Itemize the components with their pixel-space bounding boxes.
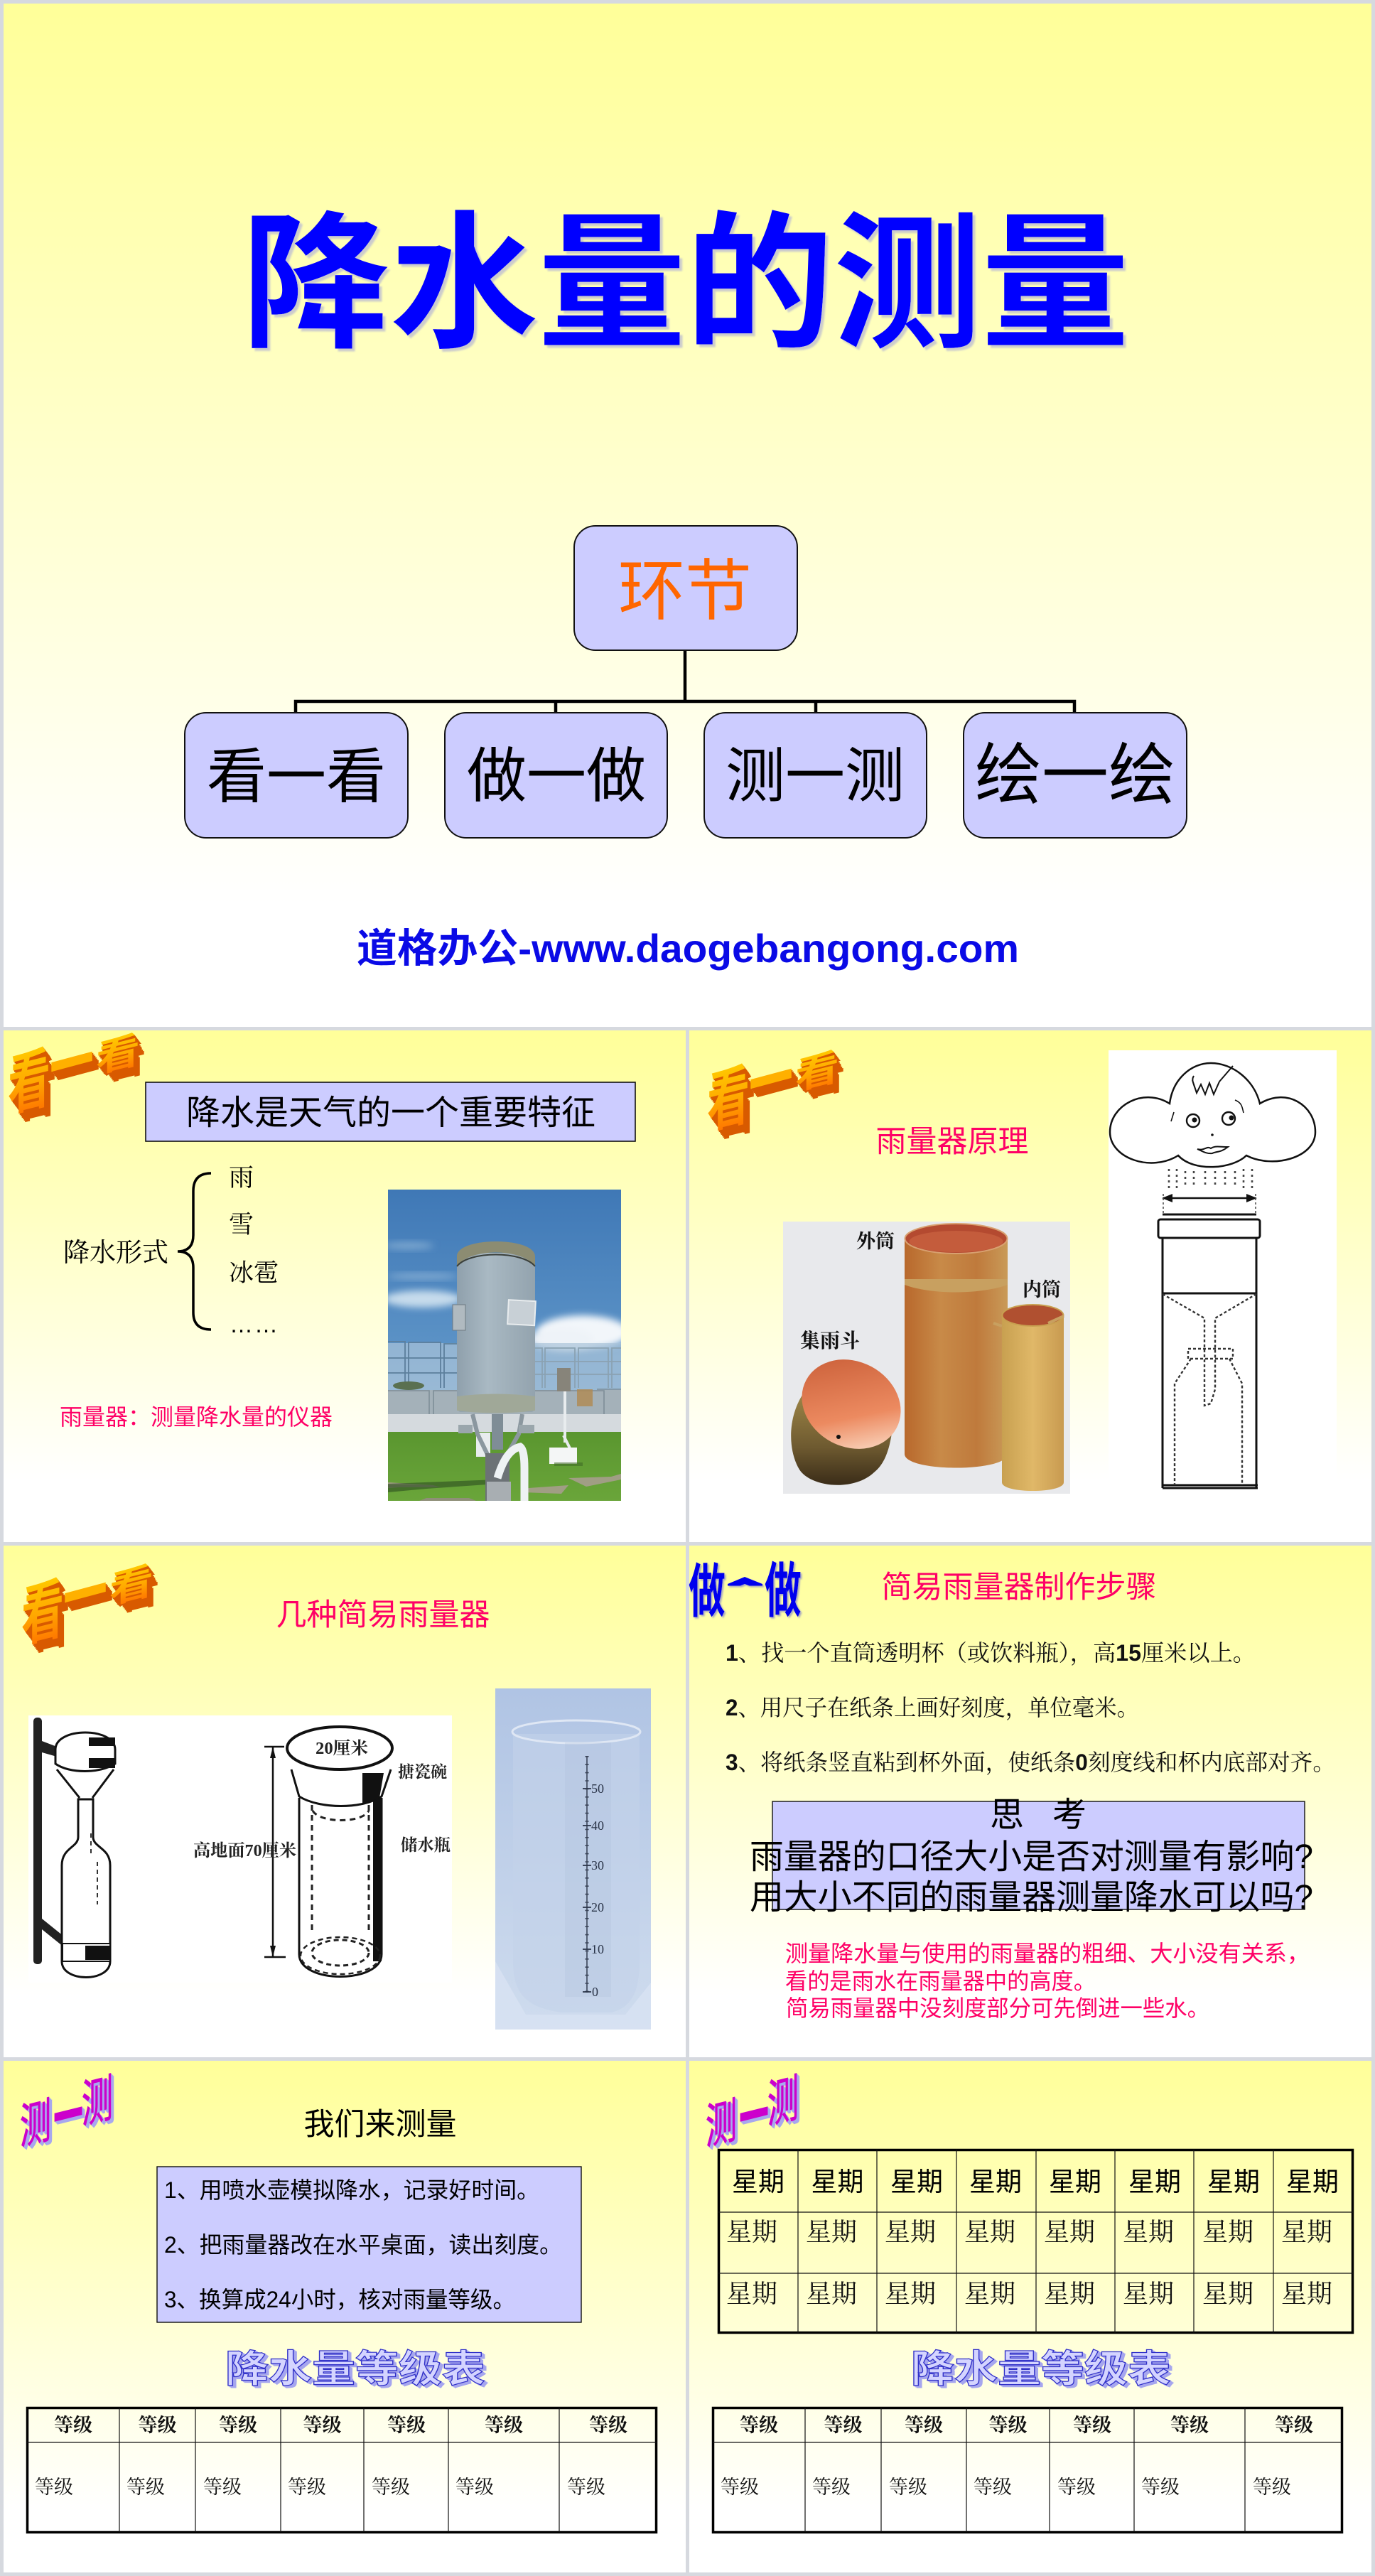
heading: 简易雨量器制作步骤 (881, 1570, 1157, 1605)
table: week record: 星期 (1123, 2218, 1174, 2246)
wordart: do: 做 (765, 1558, 802, 1624)
photo: copper gauge parts: 内筒 (1023, 1279, 1061, 1300)
wordart: measure (706, 2069, 799, 2156)
wordart: measure: 一 (739, 2077, 769, 2156)
wordart: measure (20, 2069, 113, 2156)
wordart: look: 看 (8, 1040, 50, 1124)
table: precipitation grades (713, 2408, 1342, 2533)
table: week record: 星期 (1044, 2280, 1095, 2308)
wordart: measure: 测 (82, 2069, 113, 2134)
steps box: 1、用喷水壶模拟降水，记录好时间。 (164, 2177, 539, 2203)
table: week record: 星期 (1044, 2218, 1095, 2246)
table: week record: 星期 (885, 2218, 936, 2246)
photo: graduated glass: 40 (591, 1818, 604, 1833)
table: week record: 星期 (964, 2218, 1015, 2246)
table: week record: 星期 (806, 2218, 857, 2246)
table: week record: 星期 (1049, 2167, 1101, 2197)
heading: 雨量器原理 (875, 1125, 1029, 1159)
wordart: grade table title: 降水量等级表 (225, 2348, 485, 2391)
wordart: look: 一 (63, 1550, 107, 1642)
steps box: 2、把雨量器改在水平桌面，读出刻度。 (164, 2232, 562, 2258)
table: precipitation grades: 等级 (54, 2415, 92, 2436)
list of forms (229, 1164, 279, 1337)
table: precipitation grades: 等级 (387, 2415, 426, 2436)
heading: 几种简易雨量器 (276, 1598, 490, 1632)
brace (178, 1173, 211, 1330)
think box: 思 考 (990, 1796, 1086, 1834)
table: week record: 星期 (806, 2280, 857, 2308)
table: precipitation grades: 等级 (455, 2477, 494, 2498)
org chart: node measure: 测一测 (726, 743, 905, 809)
table: week record: 星期 (1128, 2167, 1181, 2197)
dimension labels: 储水瓶 (401, 1836, 451, 1854)
wordart: do (689, 1561, 803, 1620)
table: week record: 星期 (726, 2218, 777, 2246)
table: precipitation grades: 等级 (824, 2415, 863, 2436)
wordart: look: 看 (96, 1029, 140, 1081)
step list (726, 1640, 1335, 1775)
step list: 2、用尺子在纸条上画好刻度，单位毫米。 (726, 1695, 1139, 1720)
answer text (785, 1941, 1310, 2021)
org chart: node draw: 绘一绘 (975, 738, 1175, 812)
table: precipitation grades: 等级 (889, 2477, 927, 2498)
photo: copper gauge parts: 外筒 (856, 1231, 895, 1252)
list of forms: 雨 (229, 1164, 254, 1192)
table: precipitation grades: 等级 (126, 2477, 165, 2498)
wordart: look: 看 (707, 1057, 750, 1141)
table: week record: 星期 (732, 2167, 784, 2197)
photo: graduated glass: 10 (591, 1942, 604, 1956)
panel: gauge principle slide (707, 1036, 1337, 1499)
diagram: bottle and bowl gauges (28, 1715, 452, 1983)
wordart: look (21, 1550, 153, 1655)
dimension labels: 搪瓷碗 (398, 1763, 447, 1781)
table: week record: 星期 (1207, 2167, 1260, 2197)
think box (750, 1796, 1313, 1917)
answer text: 测量降水量与使用的雨量器的粗细、大小没有关系， (785, 1941, 1310, 1966)
table: week record: 星期 (1202, 2280, 1253, 2308)
wordart: look: 看 (109, 1560, 153, 1612)
step list: 3、将纸条竖直粘到杯外面，使纸条0刻度线和杯内底部对齐。 (726, 1750, 1335, 1775)
table: precipitation grades: 等级 (812, 2477, 851, 2498)
photo: rain gauge outdoors (384, 1190, 629, 1503)
wordart: measure: 测 (767, 2069, 799, 2134)
table: precipitation grades: 等级 (203, 2477, 242, 2498)
wordart: look (707, 1036, 839, 1141)
title: 降水量的测量 (242, 203, 1129, 367)
list of forms: 冰雹 (229, 1259, 279, 1287)
table: precipitation grades: 等级 (567, 2477, 605, 2498)
heading box: 降水是天气的一个重要特征 (186, 1094, 595, 1132)
table: week record (718, 2150, 1353, 2333)
think box: 雨量器的口径大小是否对测量有影响? (750, 1838, 1313, 1876)
diagram: cloud over rain gauge (1109, 1050, 1337, 1499)
table: precipitation grades: 等级 (138, 2415, 176, 2436)
step list: 1、找一个直筒透明杯（或饮料瓶），高15厘米以上。 (726, 1640, 1256, 1666)
table: precipitation grades: 等级 (989, 2415, 1028, 2436)
dimension labels (193, 1739, 451, 1860)
panel: cover slide (185, 203, 1187, 971)
table: week record: 星期 (1286, 2167, 1339, 2197)
photo: graduated glass: 0 (592, 1985, 598, 1999)
table: precipitation grades: 等级 (740, 2415, 778, 2436)
table: week record: 星期 (885, 2280, 936, 2308)
list of forms: 雪 (229, 1211, 254, 1239)
table: precipitation grades: 等级 (1253, 2477, 1291, 2498)
heading: 我们来测量 (304, 2108, 456, 2142)
dimension labels: 20厘米 (316, 1739, 368, 1758)
wordart: measure: 测 (20, 2094, 51, 2155)
table: precipitation grades: 等级 (303, 2415, 341, 2436)
steps box: 3、换算成24小时，核对雨量等级。 (164, 2287, 515, 2312)
panel: measure slide, steps and grade table (20, 2069, 657, 2533)
think box: 用大小不同的雨量器测量降水可以吗? (750, 1879, 1313, 1917)
panel: simple rain gauges slide (21, 1550, 651, 2030)
definition text: 雨量器：测量降水量的仪器 (60, 1404, 333, 1430)
photo: graduated glass: 20 (591, 1900, 604, 1914)
table: week record: 星期 (726, 2280, 777, 2308)
wordart: measure: 一 (53, 2077, 83, 2156)
org chart: node look: 看一看 (207, 743, 386, 810)
wordart: look: 看 (21, 1571, 64, 1655)
org chart: node look (185, 713, 408, 838)
table: precipitation grades (27, 2408, 657, 2533)
table: week record: 星期 (811, 2167, 864, 2197)
photo: graduated glass (495, 1688, 651, 2030)
wordart: do: 做 (689, 1559, 726, 1624)
table: week record: 星期 (1202, 2218, 1253, 2246)
table: week record: 星期 (890, 2167, 943, 2197)
table: precipitation grades: 等级 (1073, 2415, 1111, 2436)
table: precipitation grades: 等级 (589, 2415, 627, 2436)
table: precipitation grades: 等级 (485, 2415, 523, 2436)
table: precipitation grades: 等级 (721, 2477, 759, 2498)
table: precipitation grades: 等级 (288, 2477, 326, 2498)
table: precipitation grades: 等级 (35, 2477, 73, 2498)
wordart: look: 一 (749, 1036, 793, 1128)
table: precipitation grades: 等级 (1057, 2477, 1096, 2498)
heading box (146, 1082, 635, 1141)
org chart: connector lines (296, 650, 1074, 713)
table: week record: 星期 (969, 2167, 1022, 2197)
photo: graduated glass: 30 (591, 1858, 604, 1872)
wordart: do: 一 (726, 1492, 764, 1674)
answer text: 简易雨量器中没刻度部分可先倒进一些水。 (786, 1995, 1209, 2021)
table: week record: 星期 (1281, 2280, 1332, 2308)
table: precipitation grades: 等级 (1141, 2477, 1180, 2498)
list of forms: …… (230, 1311, 278, 1337)
wordart: look: 一 (50, 1019, 94, 1111)
wordart: measure: 测 (706, 2094, 737, 2155)
website link text: 道格办公-www.daogebangong.com (357, 926, 1019, 971)
org chart: node draw (964, 713, 1187, 838)
table: precipitation grades: 等级 (1275, 2415, 1313, 2436)
wordart: look (8, 1019, 140, 1124)
org chart: root node: 环节 (618, 554, 752, 628)
table: week record: 星期 (964, 2280, 1015, 2308)
table: precipitation grades: 等级 (905, 2415, 943, 2436)
steps box (157, 2167, 581, 2322)
table: precipitation grades: 等级 (219, 2415, 257, 2436)
org chart: root node (574, 526, 797, 650)
table: precipitation grades: 等级 (372, 2477, 410, 2498)
wordart: look: 看 (795, 1046, 839, 1098)
table: precipitation grades: 等级 (974, 2477, 1012, 2498)
dimension labels: 高地面70厘米 (193, 1841, 296, 1860)
answer text: 看的是雨水在雨量器中的高度。 (785, 1968, 1096, 1994)
wordart: grade table title: 降水量等级表 (911, 2348, 1171, 2391)
photo: copper gauge parts (783, 1222, 1070, 1494)
org chart: node do (445, 713, 667, 838)
org chart: node do: 做一做 (467, 743, 646, 809)
label: precipitation forms: 降水形式 (63, 1238, 168, 1268)
photo: graduated glass: 50 (591, 1782, 604, 1796)
panel: look slide, precipitation forms (8, 1019, 635, 1503)
panel: making steps slide (689, 1561, 1320, 2018)
table: week record: 星期 (1123, 2280, 1174, 2308)
org chart: node measure (704, 713, 927, 838)
table: week record: 星期 (1281, 2218, 1332, 2246)
photo: copper gauge parts: 集雨斗 (800, 1330, 860, 1352)
panel: measure slide, weekly table (706, 2069, 1353, 2533)
table: precipitation grades: 等级 (1170, 2415, 1209, 2436)
